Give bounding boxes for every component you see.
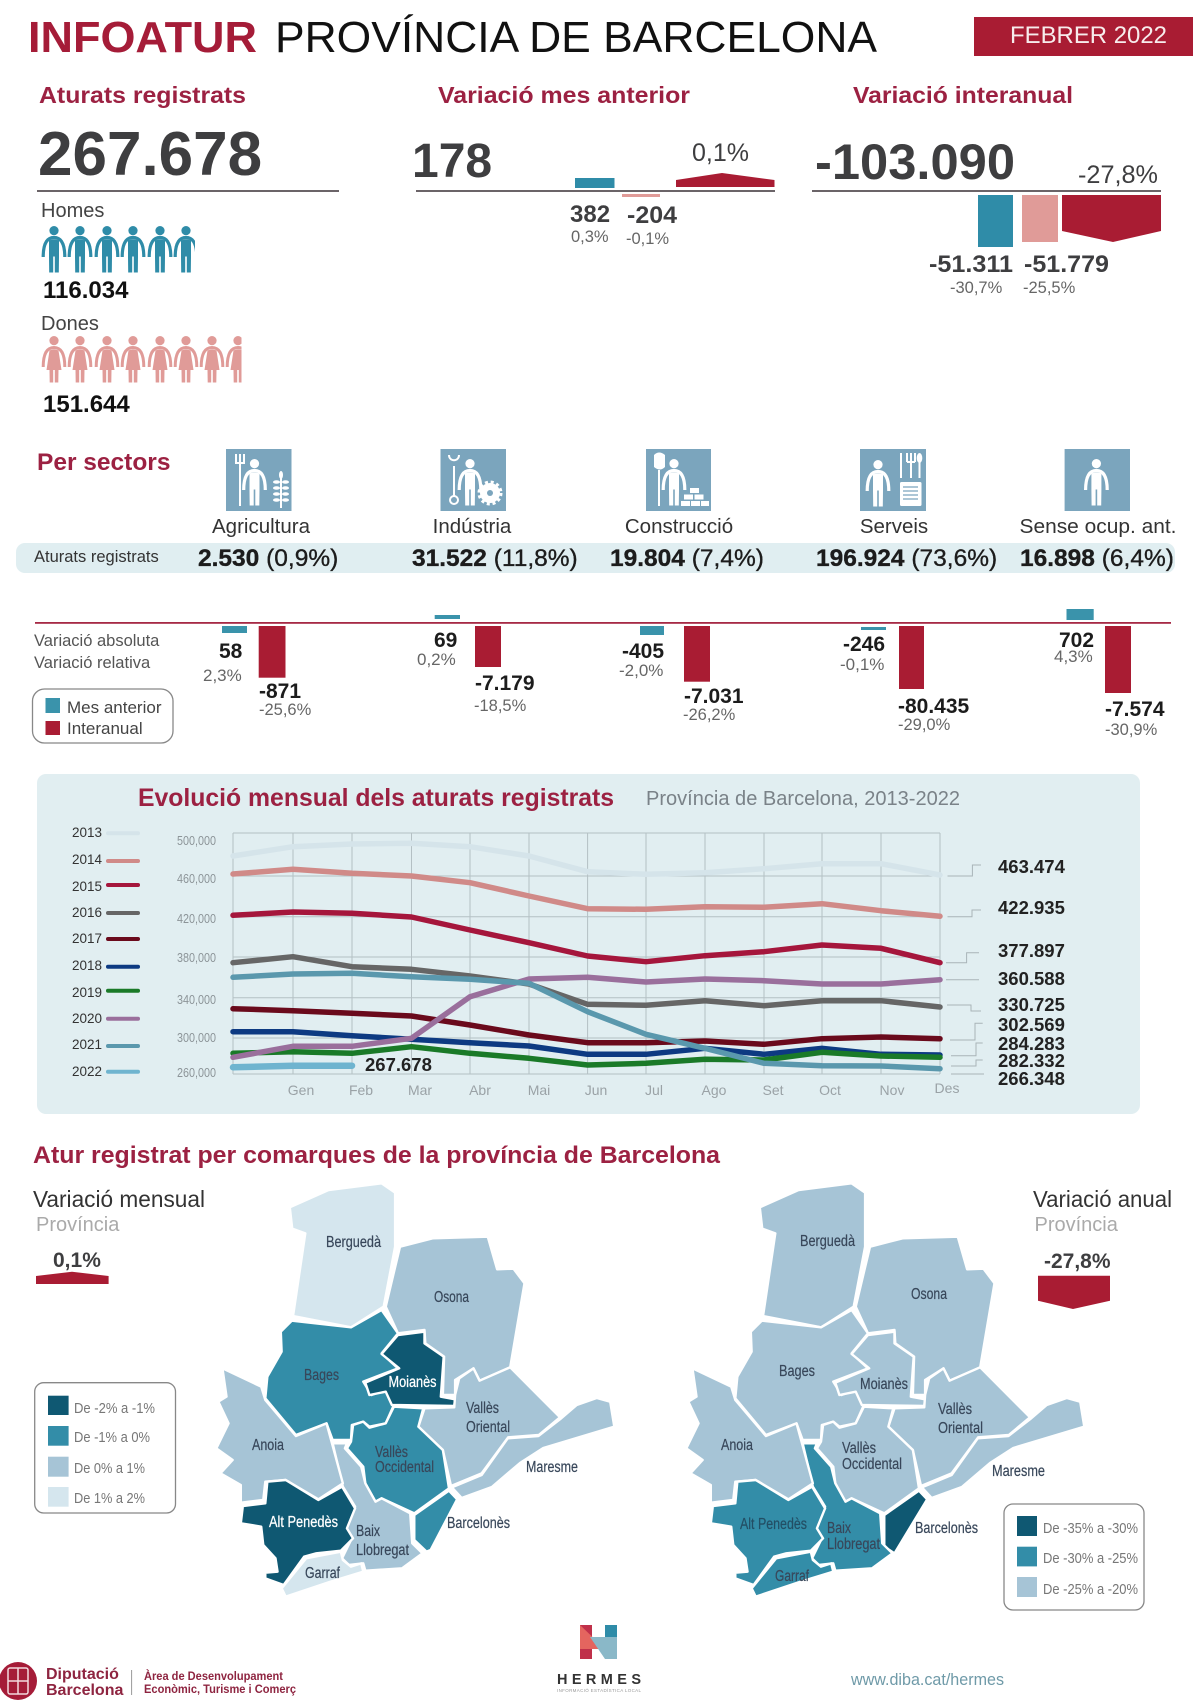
panel: variació interanual — [812, 82, 1161, 297]
sector names: Construcció — [625, 515, 733, 538]
region: Osona — [856, 1237, 994, 1395]
line chart — [233, 843, 940, 1069]
x axis months: Des — [935, 1080, 959, 1096]
map labels: variació mensual: Vallès — [375, 1444, 408, 1461]
map labels: variació mensual: Barcelonès — [447, 1515, 510, 1532]
bars: construcció: -2,0% — [619, 661, 663, 680]
x axis months — [288, 1080, 959, 1098]
legend: variació mensual: De -2% a -1% — [74, 1400, 155, 1417]
logo: Hermes — [557, 1625, 641, 1693]
y axis labels: 340,000 — [177, 992, 216, 1007]
x axis months: Gen — [288, 1082, 314, 1098]
heading: atur per comarques: Atur registrat per comarques de la província de Barcelona — [33, 1142, 720, 1169]
map labels: variació anual: Vallès — [938, 1401, 972, 1418]
title: PROVÍNCIA DE BARCELONA — [275, 13, 878, 62]
legend: years: 2021 — [72, 1037, 102, 1052]
map labels: variació anual: Garraf — [775, 1568, 810, 1585]
panel: evolució mensual — [37, 774, 1140, 1114]
panel: variació mensual: Província — [36, 1214, 120, 1236]
map labels: variació mensual: Garraf — [305, 1565, 341, 1582]
region: Bages — [265, 1310, 398, 1440]
region: Berguedà — [760, 1183, 865, 1327]
x axis months: Jun — [585, 1082, 607, 1098]
row labels: variació: Variació absoluta — [34, 632, 160, 650]
x axis months: Feb — [349, 1082, 373, 1098]
panel: variació mes anterior: 0,3% — [571, 228, 609, 246]
region: Moianès — [835, 1332, 925, 1406]
legend: variació mensual: De 1% a 2% — [74, 1490, 145, 1507]
end-of-line values: 284.283 — [998, 1033, 1065, 1054]
date badge: FEBRER 2022 — [1010, 22, 1167, 49]
map labels: variació anual: Occidental — [842, 1456, 902, 1473]
y axis labels: 300,000 — [177, 1030, 216, 1045]
row: aturats registrats per sector: 196.924 (73,6%) — [816, 545, 997, 572]
map labels: variació anual: Berguedà — [800, 1233, 855, 1250]
bars: serveis: -80.435 — [898, 695, 970, 718]
region: Alt Penedès — [711, 1480, 825, 1585]
panel: variació interanual: -103.090 — [815, 134, 1015, 190]
end-of-line values: 377.897 — [998, 940, 1065, 961]
logo: Diputació de Barcelona — [0, 1662, 297, 1700]
icon: homes pictogram — [43, 226, 197, 272]
legend: years: 2017 — [72, 931, 102, 946]
legend: variació mensual: De -1% a 0% — [74, 1429, 150, 1446]
icon: sense ocupació anterior — [1065, 449, 1130, 511]
panel: variació interanual: -51.779 — [1024, 251, 1109, 278]
region: Barcelonès — [884, 1491, 927, 1553]
bars: construcció: -26,2% — [683, 706, 736, 724]
icon: agricultura — [226, 449, 292, 511]
map labels: variació mensual: Bages — [304, 1367, 339, 1384]
end-of-line values: 422.935 — [998, 897, 1065, 918]
bars: sense ocupació anterior: 702 — [1059, 629, 1094, 652]
icon: dones pictogram — [43, 336, 249, 382]
y axis labels: 420,000 — [177, 911, 216, 926]
panel: variació interanual: -30,7% — [950, 279, 1003, 297]
bars: construcció — [619, 626, 744, 724]
panel: variació anual: Variació anual — [1033, 1186, 1172, 1212]
sector names: Indústria — [433, 515, 512, 538]
panel: variació mes anterior: 0,1% — [692, 139, 749, 167]
x axis months: Set — [762, 1082, 784, 1098]
map labels: variació mensual: Baix — [356, 1523, 380, 1540]
end-of-line values — [998, 856, 1066, 1089]
x axis months: Mai — [528, 1082, 550, 1098]
chart grid — [233, 833, 940, 1074]
end-of-line values: 302.569 — [998, 1014, 1065, 1035]
panel: variació mensual — [33, 1186, 205, 1284]
logo: Diputació de Barcelona: Barcelona — [46, 1682, 123, 1699]
legend: variació mensual — [35, 1383, 176, 1513]
region: Vallès Oriental — [418, 1367, 560, 1486]
bars: serveis: -246 — [843, 633, 885, 656]
panel: variació interanual: Variació interanual — [853, 82, 1073, 108]
panel: aturats registrats: Aturats registrats — [39, 82, 246, 108]
leader lines — [946, 865, 984, 1074]
row: aturats registrats per sector: 16.898 (6,4%) — [1020, 545, 1174, 572]
callout: 2022 value: 267.678 — [365, 1054, 432, 1075]
map labels: variació mensual: Maresme — [526, 1459, 578, 1476]
logo: Diputació de Barcelona: Econòmic, Turisme i Comerç — [144, 1684, 297, 1696]
icon: serveis — [860, 449, 926, 511]
panel: variació mes anterior: 382 — [570, 201, 610, 228]
map: variació mensual — [216, 1183, 614, 1597]
end-of-line values: 330.725 — [998, 994, 1065, 1015]
panel: variació mensual: Variació mensual — [33, 1186, 205, 1212]
map labels: variació anual: Oriental — [938, 1420, 983, 1437]
legend: years: 2013 — [72, 825, 102, 840]
legend: years: 2014 — [72, 852, 103, 867]
bars: indústria: -7.179 — [475, 672, 535, 695]
region: Vallès Oriental — [888, 1367, 1030, 1486]
y axis labels: 380,000 — [177, 950, 216, 965]
website url: www.diba.cat/hermes — [850, 1671, 1004, 1689]
region: Anoia — [686, 1368, 813, 1503]
bars: sense ocupació anterior: -30,9% — [1105, 721, 1158, 739]
region: Alt Penedès — [241, 1480, 355, 1585]
panel: variació interanual: -51.311 — [929, 251, 1013, 278]
bars: agricultura: 58 — [219, 640, 243, 663]
bars: serveis: -29,0% — [898, 716, 951, 734]
region: Garraf — [282, 1552, 363, 1597]
logo: Diputació de Barcelona: Diputació — [46, 1666, 119, 1683]
sector names: Serveis — [860, 515, 928, 538]
panel: variació interanual: -25,5% — [1023, 279, 1076, 297]
map labels: variació mensual: Oriental — [466, 1419, 510, 1436]
logo: Hermes: HERMES — [557, 1672, 641, 1688]
bars: indústria: 0,2% — [417, 650, 456, 669]
x axis months: Jul — [645, 1082, 663, 1098]
date badge — [974, 17, 1193, 56]
map labels: variació mensual: Moianès — [388, 1374, 437, 1391]
row labels: variació: Variació relativa — [34, 654, 151, 672]
x axis months: Mar — [408, 1082, 432, 1098]
legend: years: 2015 — [72, 879, 102, 894]
map labels: variació mensual: Llobregat — [356, 1542, 410, 1559]
panel: variació anual — [1033, 1186, 1172, 1309]
panel: aturats registrats — [37, 82, 339, 418]
y axis labels: 260,000 — [177, 1065, 216, 1080]
map labels: variació mensual: Alt Penedès — [269, 1514, 338, 1531]
end-of-line values: 266.348 — [998, 1068, 1065, 1089]
x axis months: Oct — [819, 1082, 841, 1098]
bars: agricultura — [203, 626, 312, 719]
x axis months: Abr — [469, 1082, 491, 1098]
region: Berguedà — [290, 1183, 395, 1327]
map labels: variació anual — [721, 1233, 1045, 1585]
region: Anoia — [216, 1368, 343, 1503]
panel: variació mensual: 0,1% — [53, 1249, 101, 1272]
panel: aturats registrats: Homes — [41, 200, 104, 222]
region: Moianès — [365, 1332, 455, 1406]
bars: sense ocupació anterior — [1054, 609, 1165, 739]
panel: aturats registrats: Dones — [41, 313, 99, 335]
map labels: variació mensual: Berguedà — [326, 1234, 381, 1251]
legend: mes anterior / interanual: Mes anterior — [67, 698, 162, 717]
legend: years: 2020 — [72, 1011, 102, 1026]
map labels: variació anual: Maresme — [992, 1463, 1045, 1480]
region: Vallès Occidental — [817, 1407, 919, 1513]
bars: indústria — [417, 615, 535, 715]
region: Garraf — [752, 1552, 833, 1597]
bars: indústria: 69 — [434, 629, 457, 652]
bars: agricultura: -871 — [259, 680, 301, 703]
row: aturats registrats per sector: 19.804 (7,4%) — [610, 545, 764, 572]
row: aturats registrats per sector: Aturats registrats — [34, 548, 159, 566]
bars: agricultura: 2,3% — [203, 666, 242, 685]
x axis months: Ago — [702, 1082, 727, 1098]
bars: serveis: -0,1% — [840, 655, 884, 674]
map labels: variació anual: Moianès — [860, 1376, 908, 1393]
chart subtitle: Província de Barcelona, 2013-2022 — [646, 788, 960, 810]
region: Baix Llobregat — [333, 1443, 422, 1571]
region: Osona — [386, 1237, 524, 1395]
panel: variació mes anterior — [412, 82, 775, 248]
map labels: variació anual: Anoia — [721, 1437, 753, 1454]
title: INFOATUR — [28, 13, 257, 62]
panel: variació anual: Província — [1034, 1214, 1119, 1236]
icon: construcció — [646, 449, 711, 511]
panel: aturats registrats: 267.678 — [38, 120, 262, 189]
y axis labels: 500,000 — [177, 833, 216, 848]
panel: variació mes anterior: Variació mes anterior — [438, 82, 690, 108]
bars: indústria: -18,5% — [474, 697, 527, 715]
end-of-line values: 463.474 — [998, 856, 1066, 877]
row: aturats registrats per sector: 2.530 (0,9%) — [198, 545, 338, 572]
bars: serveis — [840, 626, 970, 734]
region: Maresme — [922, 1398, 1084, 1498]
chart heading: Evolució mensual dels aturats registrats — [138, 785, 614, 812]
bars: construcció: -7.031 — [684, 685, 744, 708]
row labels: variació — [34, 622, 1171, 672]
legend: years: 2019 — [72, 985, 102, 1000]
map labels: variació anual: Baix — [827, 1520, 851, 1537]
region: Maresme — [452, 1398, 614, 1498]
sector names: Agricultura — [212, 515, 311, 538]
logo: Hermes: INFORMACIÓ ESTADÍSTICA LOCAL — [557, 1687, 641, 1693]
legend: variació mensual: De 0% a 1% — [74, 1460, 145, 1477]
legend: years — [72, 825, 138, 1079]
map labels: variació anual: Vallès — [842, 1440, 876, 1457]
map labels: variació mensual — [252, 1234, 578, 1582]
sector names: Sense ocup. ant. — [1020, 515, 1176, 538]
region: Vallès Occidental — [347, 1407, 449, 1513]
map labels: variació anual: Bages — [779, 1363, 815, 1380]
row: aturats registrats per sector: 31.522 (11,8%) — [412, 545, 578, 572]
region: Baix Llobregat — [803, 1443, 892, 1571]
legend: variació anual: De -30% a -25% — [1043, 1550, 1138, 1567]
map labels: variació anual: Osona — [911, 1286, 947, 1303]
region: Bages — [735, 1310, 868, 1440]
end-of-line values: 282.332 — [998, 1050, 1065, 1071]
legend: years: 2018 — [72, 958, 102, 973]
map labels: variació anual: Llobregat — [827, 1536, 881, 1553]
sector names — [212, 515, 1176, 538]
y axis labels — [177, 833, 216, 1080]
map labels: variació mensual: Vallès — [466, 1400, 499, 1417]
end-of-line values: 360.588 — [998, 968, 1065, 989]
legend: years: 2016 — [72, 905, 102, 920]
panel: variació mes anterior: -0,1% — [626, 230, 669, 248]
panel: variació mes anterior: 178 — [412, 135, 492, 188]
row: aturats registrats per sector — [16, 543, 1175, 573]
y axis labels: 460,000 — [177, 871, 216, 886]
legend: variació anual — [1004, 1504, 1144, 1610]
legend: mes anterior / interanual — [32, 689, 173, 743]
logo: Diputació de Barcelona: Àrea de Desenvolupament — [144, 1670, 283, 1683]
panel: variació mes anterior: -204 — [627, 202, 678, 229]
panel: variació anual: -27,8% — [1044, 1250, 1111, 1273]
map labels: variació anual: Alt Penedès — [740, 1516, 807, 1533]
legend: years: 2022 — [72, 1064, 102, 1079]
icon: indústria — [440, 449, 506, 511]
x axis months: Nov — [880, 1082, 904, 1098]
heading: per sectors: Per sectors — [37, 449, 170, 476]
panel: variació interanual: -27,8% — [1078, 161, 1158, 189]
map labels: variació mensual: Occidental — [375, 1459, 434, 1476]
region: Barcelonès — [414, 1491, 457, 1552]
legend: variació anual: De -35% a -30% — [1043, 1520, 1138, 1537]
map labels: variació mensual: Anoia — [252, 1437, 284, 1454]
map labels: variació mensual: Osona — [434, 1289, 469, 1306]
map labels: variació anual: Barcelonès — [915, 1520, 978, 1537]
panel: aturats registrats: 151.644 — [43, 391, 130, 418]
panel: aturats registrats: 116.034 — [43, 277, 129, 304]
bars: sense ocupació anterior: -7.574 — [1105, 698, 1165, 721]
legend: variació anual: De -25% a -20% — [1043, 1581, 1138, 1598]
legend: mes anterior / interanual: Interanual — [67, 719, 143, 738]
bars: agricultura: -25,6% — [259, 701, 312, 719]
bars: sense ocupació anterior: 4,3% — [1054, 647, 1093, 666]
bars: construcció: -405 — [622, 640, 664, 663]
map: variació anual — [686, 1183, 1084, 1597]
